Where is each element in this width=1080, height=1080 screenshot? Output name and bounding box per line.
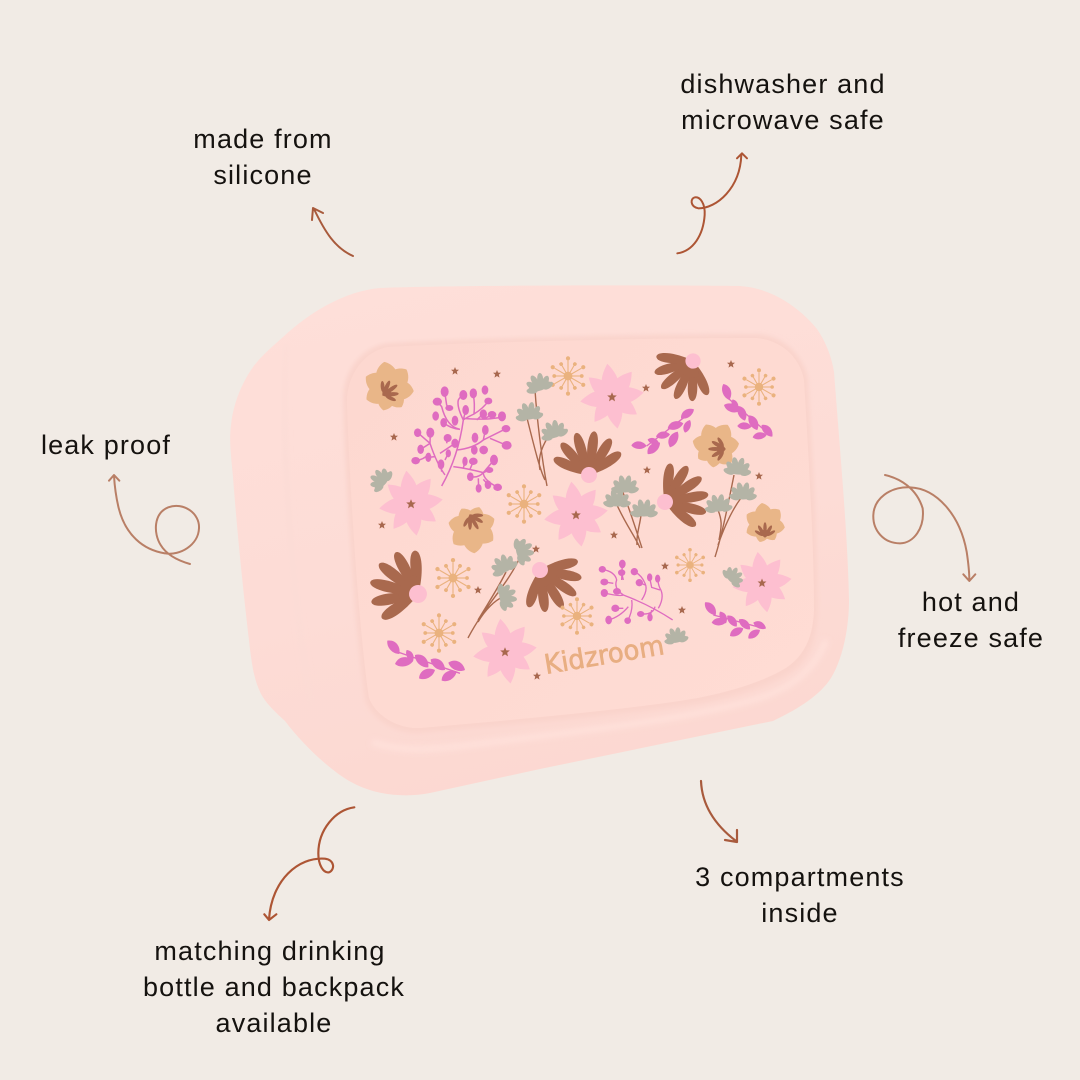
pink sprig lower left bbox=[384, 637, 467, 684]
floral print bbox=[356, 334, 792, 685]
label: made from silicone bbox=[193, 124, 333, 190]
label: leak proof: leak proof bbox=[41, 430, 171, 460]
lunch box bbox=[230, 285, 849, 795]
green stems bbox=[468, 390, 741, 638]
lower rim highlight bbox=[372, 640, 826, 749]
arrow: dishwasher and microwave safe bbox=[677, 153, 747, 253]
label: 3 compartments inside bbox=[695, 862, 905, 928]
box body silhouette bbox=[230, 285, 849, 795]
arrow: made from silicone bbox=[312, 208, 353, 256]
label: hot and freeze safe bbox=[898, 587, 1044, 653]
pink sprig lower right bbox=[702, 599, 768, 641]
label: made from silicone: made from bbox=[193, 124, 333, 154]
label: hot and freeze safe: hot and bbox=[922, 587, 1020, 617]
panel crease shadow bbox=[343, 334, 818, 733]
green leaves bbox=[364, 369, 758, 647]
label: made from silicone: silicone bbox=[213, 160, 313, 190]
pink sprig upper right centre bbox=[631, 406, 696, 457]
label: dishwasher and microwave safe: dishwasher and bbox=[680, 69, 886, 99]
small berry branch bbox=[599, 560, 673, 624]
lid rim shade bbox=[284, 345, 312, 705]
label: dishwasher and microwave safe bbox=[680, 69, 886, 135]
peach flowers bbox=[358, 357, 789, 556]
label: matching drinking bottle and backpack available bbox=[143, 936, 405, 1038]
label: matching drinking bottle and backpack available: bottle and backpack bbox=[143, 972, 405, 1002]
pink flowers bbox=[378, 363, 792, 685]
pink sprig upper right bbox=[720, 382, 776, 440]
label: matching drinking bottle and backpack available: available bbox=[216, 1008, 332, 1038]
arrow: hot and freeze safe bbox=[873, 475, 975, 581]
small brown stars bbox=[378, 360, 763, 680]
label: dishwasher and microwave safe: microwave safe bbox=[681, 105, 885, 135]
panel surface bbox=[347, 338, 814, 728]
dandelions bbox=[421, 356, 776, 653]
arrow: 3 compartments inside bbox=[701, 781, 737, 842]
brown fan flowers bbox=[356, 334, 725, 634]
brand name: Kidzroom bbox=[542, 630, 666, 681]
label: matching drinking bottle and backpack available: matching drinking bbox=[154, 936, 386, 966]
large berry branch bbox=[411, 385, 512, 493]
label: 3 compartments inside: inside bbox=[761, 898, 839, 928]
arrow: leak proof bbox=[109, 475, 199, 564]
arrow: matching bottle and backpack bbox=[264, 807, 354, 920]
lid recessed panel bbox=[343, 334, 818, 733]
label: hot and freeze safe: freeze safe bbox=[898, 623, 1044, 653]
label: 3 compartments inside: 3 compartments bbox=[695, 862, 905, 892]
